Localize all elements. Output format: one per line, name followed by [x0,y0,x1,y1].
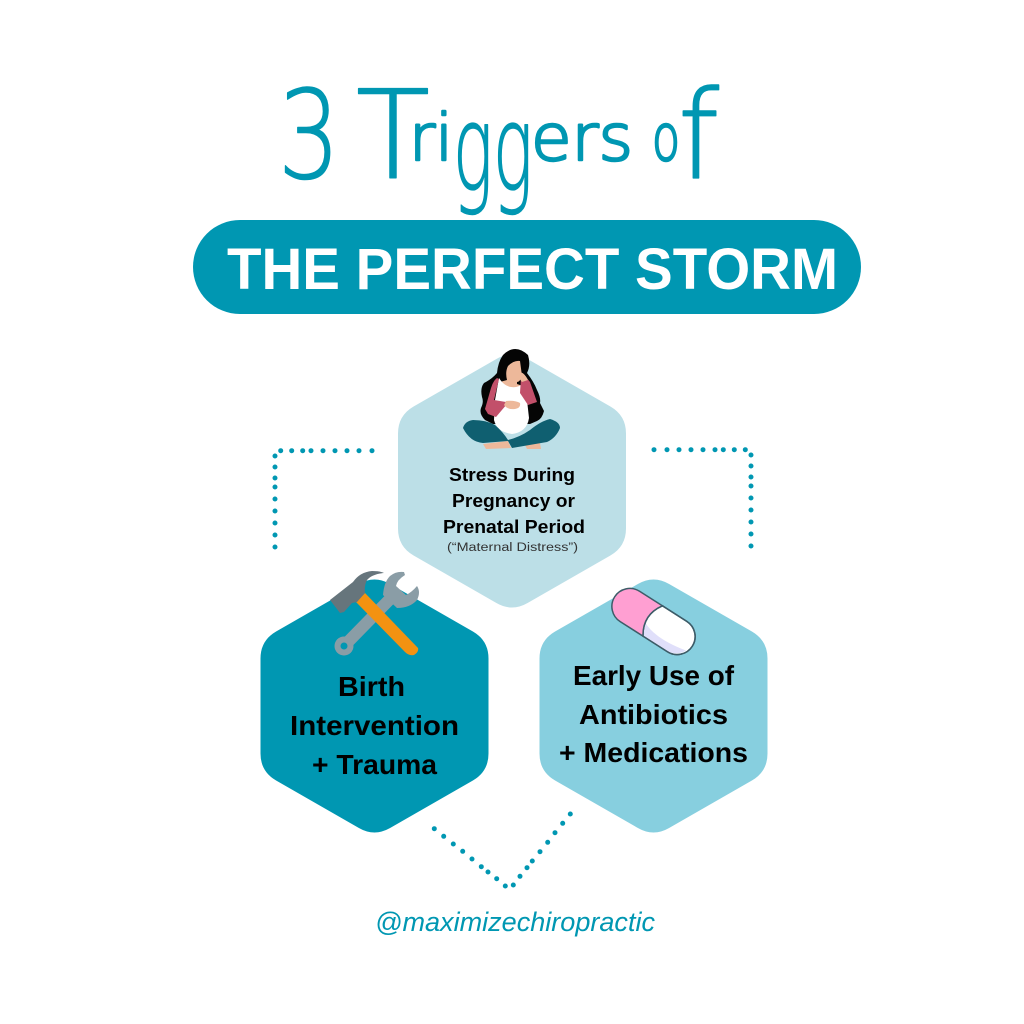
icon: hammer and wrench [330,571,419,656]
dotted chevron [434,814,570,886]
panel: early antibiotics: Antibiotics [579,699,728,730]
panel: early antibiotics [540,580,768,832]
panel: stress during pregnancy: Prenatal Period [443,516,585,537]
heading banner: the perfect storm: THE PERFECT STORM [227,237,838,302]
panel: early antibiotics: + Medications [559,737,748,768]
icon: pregnant woman [463,349,560,449]
title: 3 Triggers of: ri [409,102,453,176]
panel: birth intervention: Intervention [290,710,459,741]
dotted bracket: left [275,451,372,547]
title: 3 Triggers of: 3 [278,65,340,207]
title: 3 Triggers of: ers [531,102,633,176]
panel: stress during pregnancy: (“Maternal Distress”) [447,542,578,554]
title: 3 Triggers of: gg [453,81,533,219]
panel: stress during pregnancy [398,354,626,608]
heading banner: the perfect storm [193,220,861,314]
panel: stress during pregnancy: Stress During [449,464,575,485]
panel: birth intervention: + Trauma [312,749,437,780]
dotted bracket: right [654,450,751,546]
panel: birth intervention: Birth [338,671,405,702]
icon: pill capsule [605,582,702,661]
title: 3 Triggers of: f [678,65,719,207]
title: 3 Triggers of: T [356,65,430,207]
panel: early antibiotics: Early Use of [573,660,735,691]
panel: birth intervention [260,580,488,832]
title: 3 Triggers of: o [652,102,680,176]
panel: stress during pregnancy: Pregnancy or [452,490,575,511]
title: 3 Triggers of [278,65,719,219]
social handle: @maximizechiropractic [375,907,655,937]
